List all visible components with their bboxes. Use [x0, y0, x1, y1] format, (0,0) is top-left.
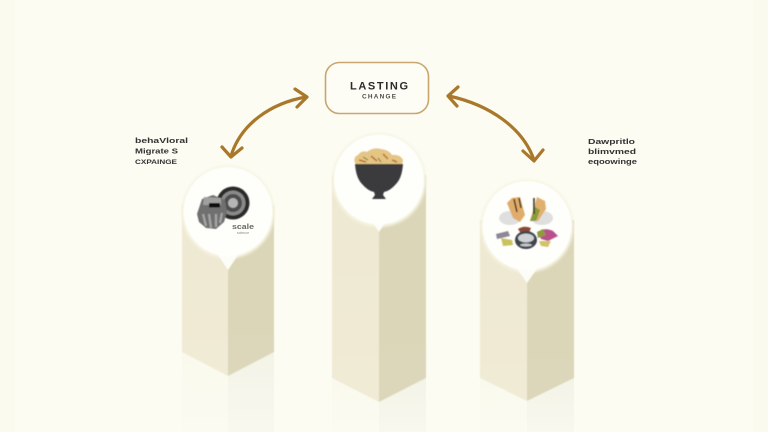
label: right pillar: blimvmed: [588, 147, 636, 156]
icon: bowl of food: [354, 148, 403, 199]
label: right pillar: eqoowinge: [588, 157, 637, 166]
label: left pillar: behaVloral: [135, 136, 188, 145]
circle badge: right: [480, 180, 574, 283]
pillar: centre: [332, 175, 426, 402]
label: left pillar: Migrate S: [135, 146, 178, 156]
label: right pillar: [588, 137, 637, 166]
circle badge: left: [182, 166, 274, 270]
icon: assorted food plates: [496, 197, 558, 249]
heading box: lasting change: [326, 62, 428, 114]
arrow: left double-headed: [222, 89, 307, 157]
pillar: left: [182, 205, 274, 376]
label: left pillar: CXPAINGE: [135, 159, 178, 166]
icon: vinyl disc and grey figure: [197, 186, 250, 229]
arrow: right double-headed: [448, 87, 543, 161]
circle badge: centre: [332, 133, 426, 232]
heading box: lasting change: CHANGE: [362, 94, 397, 100]
floor reflections of the pillars: [182, 352, 574, 432]
heading text: LASTING: [350, 80, 408, 92]
label: right pillar: Dawpritlo: [588, 137, 635, 146]
label: left pillar: [135, 136, 188, 166]
circle badge: left: science: [237, 231, 249, 235]
icon caption: scale: [232, 224, 254, 231]
pillar: right: [480, 220, 574, 401]
